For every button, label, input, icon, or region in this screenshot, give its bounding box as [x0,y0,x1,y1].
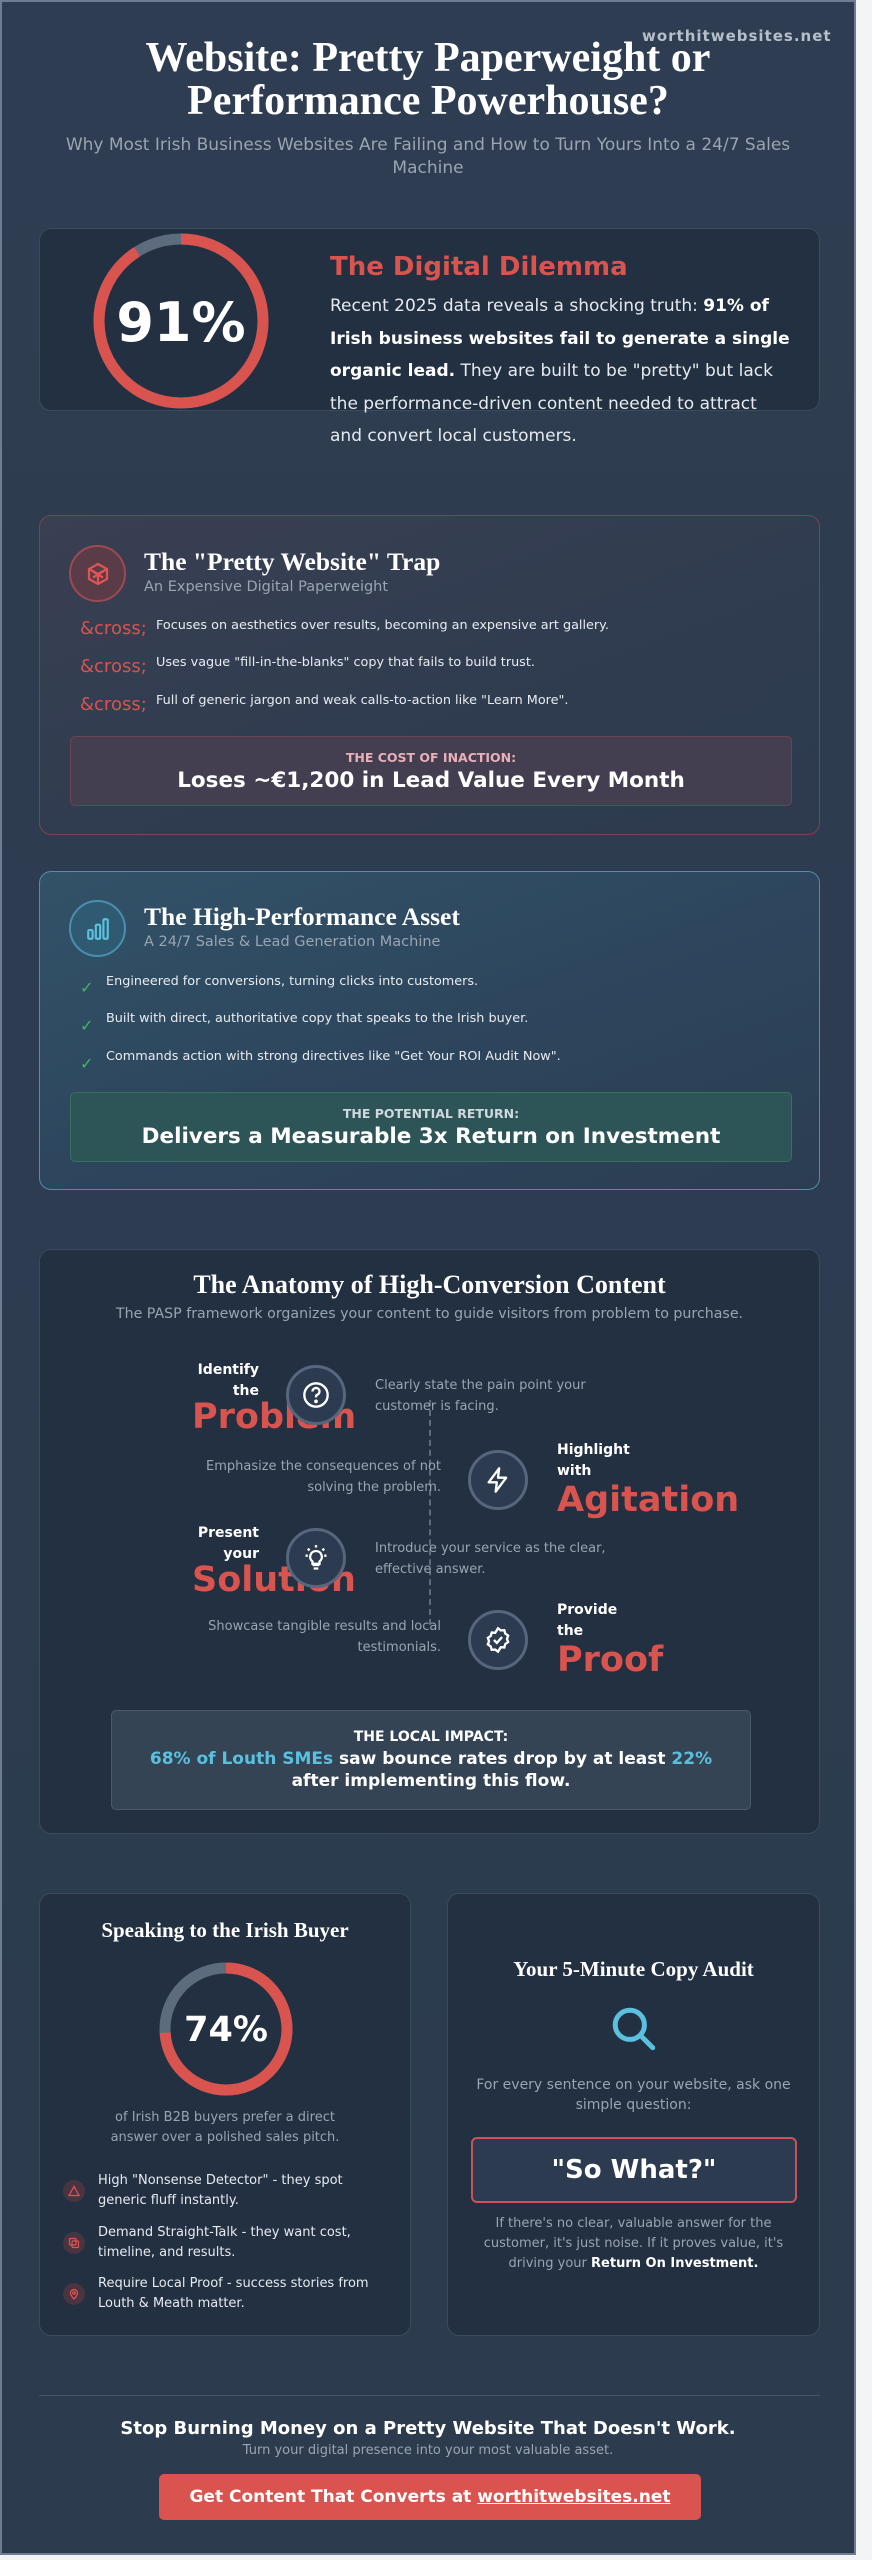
ring chart 74%: 74% [184,2010,268,2050]
CTA button [159,2474,701,2520]
watermark: worthitwebsites.net [642,27,832,45]
step: problem: Identify [198,1362,259,1378]
subheading: The PASP framework organizes your content to guide visitors from problem to purchase. [116,1306,743,1322]
bullet list: &cross; [80,618,147,639]
icon: cube [69,545,126,602]
title [146,35,710,124]
step: proof: the [557,1623,583,1639]
bullet list: ✓ [80,1054,93,1073]
bullet list: Demand Straight-Talk - they want cost, timeline, and results. [98,2225,351,2260]
step: proof: Provide [557,1602,617,1618]
bullet list: Engineered for conversions, turning clicks into customers. [106,974,478,989]
bullet list [63,2173,369,2311]
callout: local impact: THE LOCAL IMPACT: [354,1729,508,1745]
step: problem: Clearly state the pain point your customer is facing. [375,1378,586,1414]
text block: Recent 2025 data reveals a shocking truth: 91% of Irish business websites fail to generate a single organic lead. They are built to be "pretty" but lack the performance-driven content needed to attract and convert local customers. [330,296,790,446]
step: agitation [206,1442,739,1520]
step: solution: Solution [192,1560,356,1600]
text block: If there's no clear, valuable answer for the customer, it's just noise. If it proves value, it's driving your Return On Investment. [484,2216,783,2271]
step: problem [192,1362,586,1437]
bullet list: Uses vague "fill-in-the-blanks" copy that fails to build trust. [156,655,535,670]
heading: The "Pretty Website" Trap [144,547,440,576]
heading: Your 5-Minute Copy Audit [513,1957,754,1981]
step: solution [192,1525,606,1600]
callout: local impact: 68% of Louth SMEs saw bounce rates drop by at least 22% [150,1749,712,1769]
ring chart 74% [160,1962,292,2096]
step: proof: Showcase tangible results and local testimonials. [208,1619,441,1655]
footer headline: Stop Burning Money on a Pretty Website That Doesn't Work. [120,2418,736,2439]
bullet list: High "Nonsense Detector" - they spot generic fluff instantly. [98,2173,343,2208]
icon: magnifier [612,2008,656,2050]
panel: pretty website trap [39,515,820,835]
callout: cost of inaction: Loses ~€1,200 in Lead Value Every Month [177,768,685,793]
step: agitation: Agitation [557,1480,739,1520]
subtitle: Why Most Irish Business Websites Are Failing and How to Turn Yours Into a 24/7 Sales Machine [66,135,790,178]
step: agitation: with [557,1463,591,1479]
panel: high-performance asset [39,871,820,1190]
callout: local impact: after implementing this flow. [292,1771,570,1791]
step: problem: Problem [192,1397,356,1437]
heading: Speaking to the Irish Buyer [101,1918,349,1942]
callout: cost of inaction [70,736,792,806]
ring chart 91% [94,234,268,408]
panel: digital dilemma [39,228,820,411]
panel: anatomy [39,1249,820,1834]
step: agitation: Emphasize the consequences of not solving the problem. [206,1459,441,1495]
text block: For every sentence on your website, ask one simple question: [476,2077,791,2113]
bullet list [80,974,561,1073]
bullet list: &cross; [80,694,147,715]
callout: cost of inaction: THE COST OF INACTION: [346,750,516,765]
heading: The Digital Dilemma [330,252,628,282]
text block: of Irish B2B buyers prefer a direct answer over a polished sales pitch. [111,2110,339,2145]
callout: so what: "So What?" [552,2155,716,2185]
step: proof: Proof [557,1640,663,1680]
step: solution: Introduce your service as the clear, effective answer. [375,1541,606,1577]
step: proof [208,1602,664,1680]
callout: potential return [70,1092,792,1162]
bullet list: ✓ [80,978,93,997]
subheading: A 24/7 Sales & Lead Generation Machine [144,934,440,950]
footer subline: Turn your digital presence into your most valuable asset. [243,2443,613,2458]
step: agitation: Highlight [557,1442,630,1458]
callout: potential return: THE POTENTIAL RETURN: [343,1106,519,1121]
bullet list: Full of generic jargon and weak calls-to-action like "Learn More". [156,693,568,708]
heading: The Anatomy of High-Conversion Content [193,1270,666,1299]
bullet list: Commands action with strong directives like "Get Your ROI Audit Now". [106,1049,561,1064]
callout: potential return: Delivers a Measurable 3x Return on Investment [142,1124,720,1149]
callout: so what [471,2137,797,2203]
dashed timeline [429,1400,431,1625]
subheading: An Expensive Digital Paperweight [144,579,388,595]
title: Website: Pretty Paperweight or [146,35,710,81]
title: Performance Powerhouse? [187,78,669,124]
bullet list [80,618,609,715]
heading: The High-Performance Asset [144,902,460,931]
bullet list: Require Local Proof - success stories from Louth & Meath matter. [98,2276,369,2311]
step: solution: Present [198,1525,259,1541]
bullet list: &cross; [80,656,147,677]
bullet list: Focuses on aesthetics over results, becoming an expensive art gallery. [156,618,609,633]
bullet list: Built with direct, authoritative copy that speaks to the Irish buyer. [106,1011,528,1026]
CTA button: Get Content That Converts at worthitwebsites.net [189,2487,671,2507]
panel: copy audit [447,1893,820,2336]
ring chart 91%: 91% [116,291,246,354]
callout: local impact [111,1710,751,1810]
step: problem: the [233,1383,259,1399]
panel: irish buyer [39,1893,411,2336]
icon: bar chart [69,900,126,957]
bullet list: ✓ [80,1016,93,1035]
step: solution: your [223,1546,259,1562]
